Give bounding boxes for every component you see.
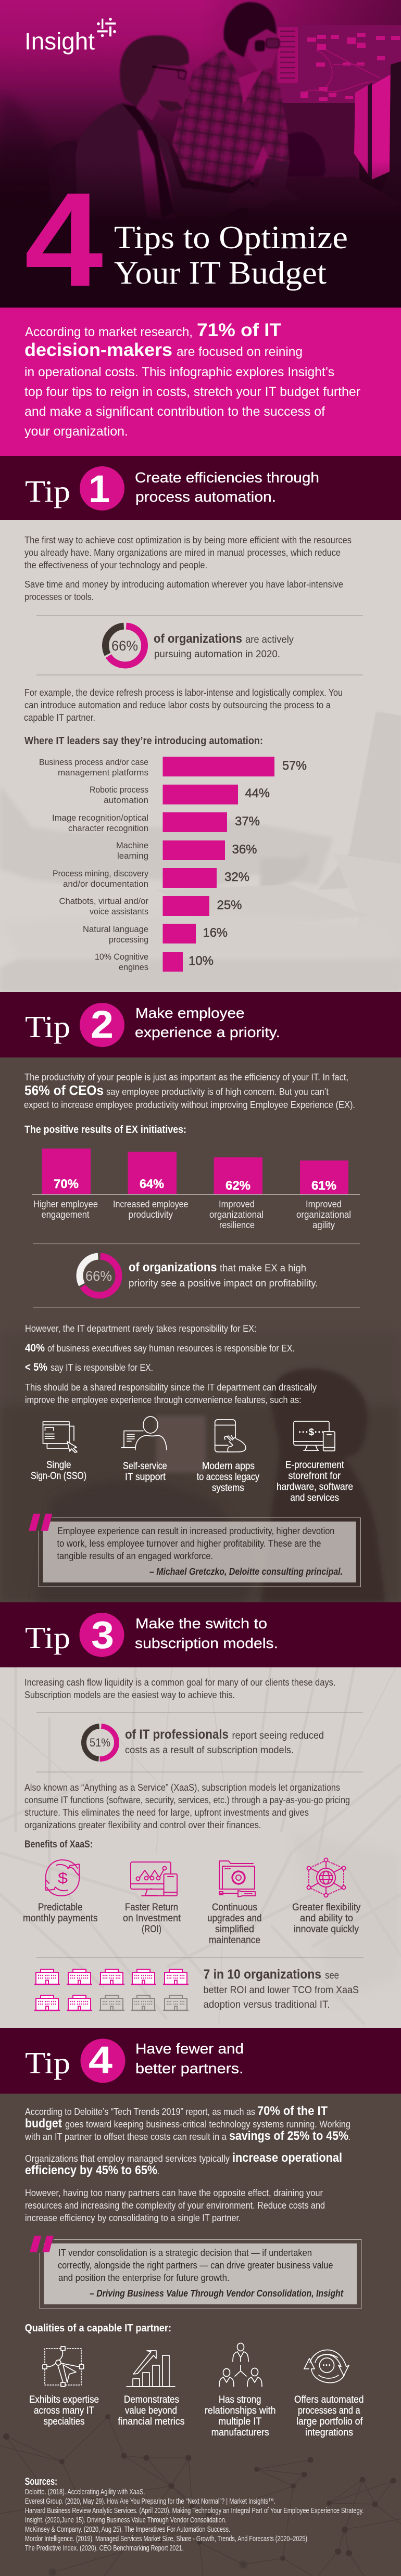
desk bbox=[245, 177, 401, 229]
tip 3 header: Make the switch to bbox=[135, 1615, 267, 1631]
tip 2 header: Tip bbox=[25, 1010, 70, 1044]
benefit labels: (ROI) bbox=[142, 1924, 161, 1935]
intro text: efficiency by 45% to 65% bbox=[25, 2163, 157, 2177]
feature labels: IT support bbox=[125, 1472, 166, 1483]
logo: Insight: Insight bbox=[24, 28, 95, 55]
stat text bbox=[129, 1260, 318, 1289]
intro text: the effectiveness of your technology and people. bbox=[24, 560, 207, 570]
intro text: 70% of the IT bbox=[257, 2104, 328, 2118]
feature labels: Modern apps bbox=[202, 1461, 255, 1472]
panel: intro bbox=[0, 308, 401, 456]
woman bbox=[172, 2, 301, 202]
bar chart: 37% bbox=[235, 814, 260, 828]
benefit labels: maintenance bbox=[209, 1935, 260, 1946]
stat text: costs as a result of subscription models. bbox=[125, 1745, 294, 1756]
bar chart: management platforms bbox=[58, 768, 148, 777]
benefit labels: monthly payments bbox=[23, 1913, 98, 1924]
tip 3 header: 3 bbox=[91, 1613, 114, 1656]
icon: predictable payments bbox=[46, 1860, 79, 1896]
tip 2 header bbox=[0, 992, 401, 1057]
donut: 66 percent: 66% bbox=[111, 638, 138, 654]
logo mark bbox=[97, 18, 116, 37]
intro text: The first way to achieve cost optimization is by being more efficient with the resources bbox=[24, 535, 352, 545]
column chart: Increased employee bbox=[113, 1199, 189, 1209]
benefit labels: Continuous bbox=[212, 1902, 257, 1913]
feature labels: to access legacy bbox=[197, 1472, 259, 1483]
quality labels: multiple IT bbox=[218, 2416, 262, 2427]
icon: flexibility bbox=[307, 1858, 346, 1897]
intro text: with an IT partner to offset these costs can result in a bbox=[24, 2132, 227, 2142]
tip 3 header: Tip bbox=[25, 1621, 70, 1655]
callout: quote 1: tangible results of an engaged workforce. bbox=[57, 1551, 213, 1561]
column chart: resilience bbox=[219, 1220, 255, 1230]
chart heading: Where IT leaders say they’re introducing automation: bbox=[24, 735, 263, 747]
column chart: organizational bbox=[209, 1209, 264, 1220]
quality labels: Demonstrates bbox=[124, 2394, 179, 2405]
bar chart: 32% bbox=[224, 870, 249, 884]
bar chart: Chatbots, virtual and/or bbox=[59, 896, 148, 906]
responsibility text: 40% bbox=[25, 1342, 45, 1354]
stat text: adoption versus traditional IT. bbox=[203, 1999, 330, 2010]
intro text: However, having too many partners can have the opposite effect, draining your bbox=[25, 2188, 323, 2198]
icon: predictable payments: $ bbox=[58, 1870, 68, 1887]
quality labels bbox=[29, 2394, 364, 2438]
panel: tip 4 body bbox=[0, 2094, 401, 2576]
example text bbox=[24, 687, 343, 723]
column chart: productivity bbox=[128, 1209, 173, 1220]
column chart bbox=[32, 1149, 360, 1230]
example text: can introduce automation and reduce labor costs by outsourcing the process to a bbox=[24, 700, 331, 710]
tip 2 header: 2 bbox=[91, 1003, 114, 1046]
icon: e-procurement storefront bbox=[294, 1421, 335, 1451]
stat text: better ROI and lower TCO from XaaS bbox=[203, 1985, 359, 1996]
column chart: Higher employee bbox=[33, 1199, 98, 1209]
bar chart: 16% bbox=[203, 926, 228, 940]
stat text bbox=[125, 1727, 324, 1756]
bar chart: 36% bbox=[232, 843, 257, 857]
panel: intro: in operational costs. This infographic explores Insight’s bbox=[24, 365, 334, 379]
callout: quote 1: to work, less employee turnover and higher profitability. These are the bbox=[57, 1538, 321, 1549]
stat text: are actively bbox=[245, 634, 294, 645]
quality labels: Exhibits expertise bbox=[29, 2394, 99, 2405]
background photo: building girders bbox=[0, 1667, 401, 2024]
benefit labels bbox=[23, 1902, 361, 1946]
tip 1 header: process automation. bbox=[135, 489, 276, 505]
tip 4 header: 4 bbox=[89, 2038, 112, 2082]
feature labels: systems bbox=[212, 1483, 244, 1494]
tip 1 header bbox=[0, 456, 401, 520]
title: Tips to Optimize bbox=[114, 220, 348, 256]
column chart: agility bbox=[312, 1220, 335, 1230]
responsibility text: improve the employee experience through convenience features, such as: bbox=[25, 1395, 302, 1405]
stat text bbox=[154, 632, 294, 660]
title: Your IT Budget bbox=[114, 256, 327, 291]
intro text: you already have. Many organizations are mired in manual processes, which reduce bbox=[24, 547, 341, 558]
monitors bbox=[354, 61, 401, 204]
panel: intro: are focused on reining bbox=[177, 345, 303, 359]
feature labels: hardware, software bbox=[277, 1482, 353, 1493]
responsibility text: However, the IT department rarely takes responsibility for EX: bbox=[25, 1323, 257, 1334]
intro text: increase operational bbox=[232, 2151, 342, 2165]
sources: McKinsey & Company. (2020, Aug 25). The Imperatives For Automation Success. bbox=[25, 2526, 230, 2534]
intro text: Increasing cash flow liquidity is a common goal for many of our clients these days. bbox=[24, 1677, 335, 1688]
bar chart: 10% bbox=[189, 954, 214, 968]
example text: For example, the device refresh process is labor-intense and logistically complex. You bbox=[24, 687, 343, 698]
bar chart: learning bbox=[117, 851, 148, 861]
benefit labels: simplified bbox=[215, 1924, 254, 1935]
tip 1 header: Create efficiencies through bbox=[135, 469, 319, 486]
tip 3 header: subscription models. bbox=[135, 1635, 278, 1651]
benefit labels: Greater flexibility bbox=[292, 1902, 361, 1913]
column chart: engagement bbox=[42, 1209, 90, 1220]
panel: intro: decision-makers bbox=[24, 340, 172, 360]
logo: Insight bbox=[24, 18, 116, 55]
feature labels: Sign-On (SSO) bbox=[31, 1471, 86, 1482]
icon: faster ROI bbox=[131, 1862, 177, 1896]
donut: 66 percent bbox=[105, 626, 145, 665]
tip 2 header: Make employee bbox=[135, 1005, 245, 1021]
donut: 51 percent: 51% bbox=[90, 1736, 110, 1749]
icon: value beyond metrics bbox=[127, 2351, 175, 2387]
wall below screen bbox=[250, 103, 359, 182]
tip 1 header: Tip bbox=[25, 474, 70, 508]
intro text: Save time and money by introducing automation wherever you have labor-intensive bbox=[24, 579, 343, 590]
panel: intro: According to market research, bbox=[25, 325, 193, 339]
hero photo bbox=[0, 0, 401, 308]
man bbox=[76, 35, 276, 224]
quality labels: Has strong bbox=[219, 2394, 261, 2405]
intro text: expect to increase employee productivity without improving Employee Experience (EX). bbox=[24, 1100, 355, 1110]
qualities heading: Qualities of a capable IT partner: bbox=[25, 2323, 171, 2334]
intro text: According to Deloitte’s “Tech Trends 2019” report, as much as bbox=[25, 2107, 255, 2117]
sources: Everest Group. (2020, May 29). How Are You Preparing for the “Next Normal”? | Market Insights™. bbox=[25, 2497, 275, 2506]
icon: relationships bbox=[219, 2343, 262, 2387]
icon: self-service IT support bbox=[122, 1417, 167, 1450]
intro text: processes or tools. bbox=[24, 592, 94, 602]
intro text: Organizations that employ managed services typically bbox=[25, 2153, 230, 2164]
chair bbox=[47, 141, 78, 208]
XaaS text: organizations greater flexibility and control over their finances. bbox=[24, 1820, 261, 1830]
column chart: Improved bbox=[219, 1199, 255, 1209]
stat text bbox=[203, 1967, 359, 2010]
responsibility text: This should be a shared responsibility since the IT department can drastically bbox=[25, 1382, 317, 1393]
intro text: Subscription models are the easiest way to achieve this. bbox=[24, 1690, 235, 1700]
sources: Mordor Intelligence. (2019). Managed Services Market Size, Share - Growth, Trends, And Forecasts (2020–2025). bbox=[25, 2535, 309, 2543]
callout: quote 1 bbox=[29, 1514, 360, 1587]
intro text: The productivity of your people is just as important as the efficiency of your IT. In fact, bbox=[24, 1072, 348, 1082]
XaaS text: Also known as “Anything as a Service” (XaaS), subscription models let organizations bbox=[24, 1782, 340, 1793]
sources: Sources: bbox=[25, 2476, 57, 2488]
feature labels: E-procurement bbox=[285, 1460, 344, 1471]
icon: single sign-on bbox=[43, 1422, 77, 1452]
bar chart: Natural language bbox=[83, 924, 148, 934]
panel: intro: 71% of IT bbox=[197, 320, 281, 340]
panel: intro: and make a significant contribution to the success of bbox=[24, 404, 325, 419]
sources: Deloitte. (2018). Accelerating Agility with XaaS. bbox=[25, 2488, 145, 2496]
benefit labels: upgrades and bbox=[207, 1913, 261, 1924]
bar chart: Business process and/or case bbox=[39, 757, 148, 767]
stat text: that make EX a high bbox=[220, 1263, 306, 1274]
intro text: resources and increasing the complexity of your environment. Reduce costs and bbox=[25, 2200, 325, 2211]
column chart: 70% bbox=[54, 1177, 79, 1191]
benefit labels: Predictable bbox=[38, 1902, 83, 1913]
wall screen bbox=[276, 25, 401, 103]
donut: 66 percent: 66% bbox=[85, 1268, 112, 1284]
bar chart: 10% Cognitive bbox=[95, 952, 148, 962]
stat text: of organizations bbox=[154, 632, 242, 646]
quality labels: value beyond bbox=[125, 2405, 177, 2416]
quality labels: relationships with bbox=[205, 2405, 276, 2416]
bar chart: Robotic process bbox=[90, 785, 148, 795]
panel: intro: top four tips to reign in costs, stretch your IT budget further bbox=[24, 385, 360, 399]
bar chart: 44% bbox=[245, 786, 270, 800]
callout: quote 2: and position the enterprise for future growth. bbox=[58, 2273, 230, 2283]
title bbox=[24, 165, 348, 314]
stat text: report seeing reduced bbox=[232, 1730, 324, 1741]
tip 4 header bbox=[0, 2028, 401, 2094]
intro text: budget bbox=[25, 2116, 62, 2131]
callout: quote 2: correctly, alongside the right partners — can drive greater business value bbox=[58, 2260, 333, 2271]
callout: quote 2 bbox=[30, 2236, 361, 2309]
intro text: . bbox=[348, 2132, 350, 2142]
bar chart: voice assistants bbox=[90, 907, 148, 916]
icon: continuous upgrades bbox=[219, 1861, 255, 1897]
column chart: Improved bbox=[306, 1199, 342, 1209]
stat text: see bbox=[325, 1970, 339, 1981]
sources bbox=[25, 2476, 364, 2553]
bar chart: 25% bbox=[217, 898, 242, 912]
intro text: . bbox=[157, 2166, 159, 2176]
tip 4 header: Tip bbox=[25, 2046, 70, 2080]
XaaS text: consume IT functions (software, security, services, etc.) through a pay-as-you-go pricing bbox=[24, 1795, 350, 1805]
bar chart: processing bbox=[109, 935, 148, 945]
quality labels: Offers automated bbox=[294, 2394, 364, 2405]
tip 4 header: better partners. bbox=[135, 2060, 244, 2076]
intro text: 56% of CEOs bbox=[24, 1082, 104, 1098]
feature labels: Self-service bbox=[123, 1461, 167, 1472]
quality labels: across many IT bbox=[34, 2405, 94, 2416]
icon: expertise bbox=[43, 2347, 84, 2387]
bar chart: character recognition bbox=[68, 823, 148, 833]
callout: quote 2: – Driving Business Value Through Vendor Consolidation, Insight bbox=[90, 2288, 344, 2299]
stat text: of IT professionals bbox=[125, 1727, 229, 1742]
benefits heading: Benefits of XaaS: bbox=[24, 1839, 93, 1850]
quality labels: processes and a bbox=[298, 2405, 360, 2416]
feature labels: Single bbox=[46, 1460, 71, 1471]
quality labels: large portfolio of bbox=[296, 2416, 363, 2427]
stat text: of organizations bbox=[129, 1260, 217, 1274]
tip 4 header: Have fewer and bbox=[135, 2041, 244, 2057]
feature labels bbox=[31, 1460, 353, 1503]
panel: tip 1 body bbox=[0, 520, 401, 992]
intro text bbox=[24, 1677, 335, 1700]
bar chart bbox=[39, 757, 307, 972]
bar chart: 57% bbox=[282, 759, 307, 773]
quality labels: specialties bbox=[44, 2416, 84, 2427]
quality labels: manufacturers bbox=[211, 2427, 269, 2438]
background chair bbox=[286, 132, 325, 177]
responsibility text bbox=[25, 1323, 317, 1405]
bar chart: and/or documentation bbox=[63, 879, 148, 889]
feature labels: and services bbox=[291, 1493, 339, 1503]
column chart: organizational bbox=[296, 1209, 351, 1220]
intro text bbox=[24, 2104, 350, 2223]
bar chart: automation bbox=[104, 795, 148, 805]
stat text: priority see a positive impact on profitability. bbox=[129, 1278, 318, 1289]
benefit labels: and ability to bbox=[300, 1913, 353, 1924]
benefit labels: on Investment bbox=[123, 1913, 181, 1924]
stat text: 7 in 10 organizations bbox=[203, 1967, 321, 1982]
bar chart: Machine bbox=[116, 840, 148, 850]
tip 3 header bbox=[0, 1602, 401, 1667]
panel: tip 2 body bbox=[0, 1057, 401, 1602]
intro text: goes toward keeping business-critical technology systems running. Working bbox=[65, 2119, 350, 2129]
feature labels: storefront for bbox=[289, 1471, 341, 1482]
responsibility text: < 5% bbox=[25, 1361, 47, 1373]
icon: e-procurement storefront: ···$··· bbox=[298, 1427, 324, 1437]
XaaS text: structure. This eliminates the need for large, upfront investments and gives bbox=[24, 1807, 309, 1818]
quote mark bbox=[29, 1514, 52, 1531]
example text: capable IT partner. bbox=[24, 712, 95, 723]
stat text: pursuing automation in 2020. bbox=[154, 649, 280, 660]
callout: quote 1: Employee experience can result in increased productivity, higher devotion bbox=[57, 1526, 334, 1536]
bar chart: engines bbox=[119, 962, 148, 972]
chart heading: The positive results of EX initiatives: bbox=[24, 1124, 186, 1136]
donut: 51 percent bbox=[84, 1726, 117, 1759]
title: 4 bbox=[24, 165, 104, 314]
callout: quote 2: IT vendor consolidation is a strategic decision that — if undertaken bbox=[58, 2248, 312, 2258]
responsibility text: say IT is responsible for EX. bbox=[51, 1362, 153, 1373]
background: network lines bbox=[0, 2414, 401, 2576]
intro text: say employee productivity is of high concern. But you can’t bbox=[106, 1087, 329, 1097]
column chart: 62% bbox=[225, 1179, 250, 1193]
background photo: laptop and hands bbox=[0, 711, 401, 992]
background photo: woman at laptop bbox=[0, 1332, 401, 1602]
sources: The Predictive Index. (2020). CEO Benchmarking Report 2021. bbox=[25, 2544, 184, 2553]
quality labels: financial metrics bbox=[118, 2416, 185, 2427]
benefit labels: innovate quickly bbox=[294, 1924, 359, 1935]
intro text bbox=[24, 1072, 355, 1110]
column chart: 64% bbox=[140, 1177, 164, 1191]
icon: automated processes: ··· bbox=[322, 2360, 331, 2370]
callout: quote 1: – Michael Gretczko, Deloitte consulting principal. bbox=[149, 1566, 343, 1577]
column chart: 61% bbox=[311, 1179, 336, 1193]
sources: Insight. (2020,June 15). Driving Business Value Through Vendor Consolidation. bbox=[25, 2516, 227, 2524]
quote mark bbox=[30, 2236, 54, 2252]
benefit labels: Faster Return bbox=[125, 1902, 178, 1913]
bar chart: Process mining, discovery bbox=[53, 869, 148, 878]
panel: tip 3 body bbox=[0, 1667, 401, 2028]
intro text: savings of 25% to 45% bbox=[229, 2129, 348, 2143]
XaaS text bbox=[24, 1782, 350, 1830]
tip 2 header: experience a priority. bbox=[135, 1024, 280, 1040]
donut: 66 percent bbox=[80, 1256, 119, 1295]
tip 1 header: 1 bbox=[89, 467, 110, 511]
intro text: increase efficiency by consolidating to a single IT partner. bbox=[25, 2213, 241, 2223]
icon array: 7 of 10 buildings bbox=[34, 1969, 189, 2010]
quality labels: integrations bbox=[305, 2427, 353, 2438]
panel: intro: your organization. bbox=[24, 424, 128, 439]
icon: automated processes bbox=[304, 2350, 349, 2383]
intro text bbox=[24, 535, 352, 602]
responsibility text: of business executives say human resources is responsible for EX. bbox=[47, 1343, 295, 1354]
bar chart: Image recognition/optical bbox=[52, 813, 148, 823]
icon: modern apps bbox=[215, 1420, 246, 1452]
